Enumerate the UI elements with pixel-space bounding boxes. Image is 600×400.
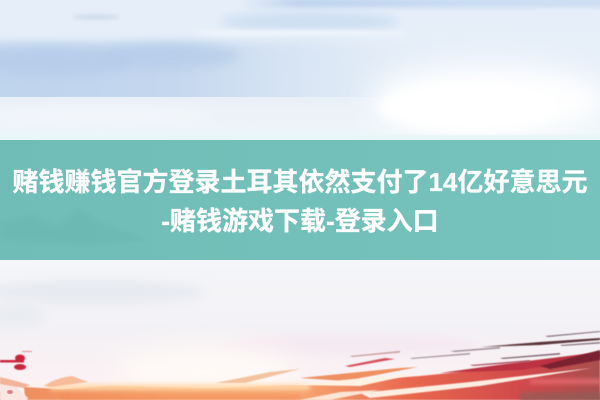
headline line 2: -赌钱游戏下载-登录入口 xyxy=(161,206,439,236)
teal title band xyxy=(0,140,600,260)
headline line 1: 赌钱赚钱官方登录土耳其依然支付了14亿好意思元 xyxy=(13,167,587,197)
orange strokes xyxy=(215,352,600,400)
dark speckled streaks upper right xyxy=(350,331,600,369)
ember ground xyxy=(0,352,600,400)
faint mountain silhouette xyxy=(0,208,150,246)
upper sky with clouds xyxy=(0,0,600,142)
left splashes xyxy=(0,382,28,400)
lower sky and sunset brush strokes xyxy=(0,260,600,400)
red paint splash xyxy=(0,351,32,370)
headline text xyxy=(12,167,587,236)
